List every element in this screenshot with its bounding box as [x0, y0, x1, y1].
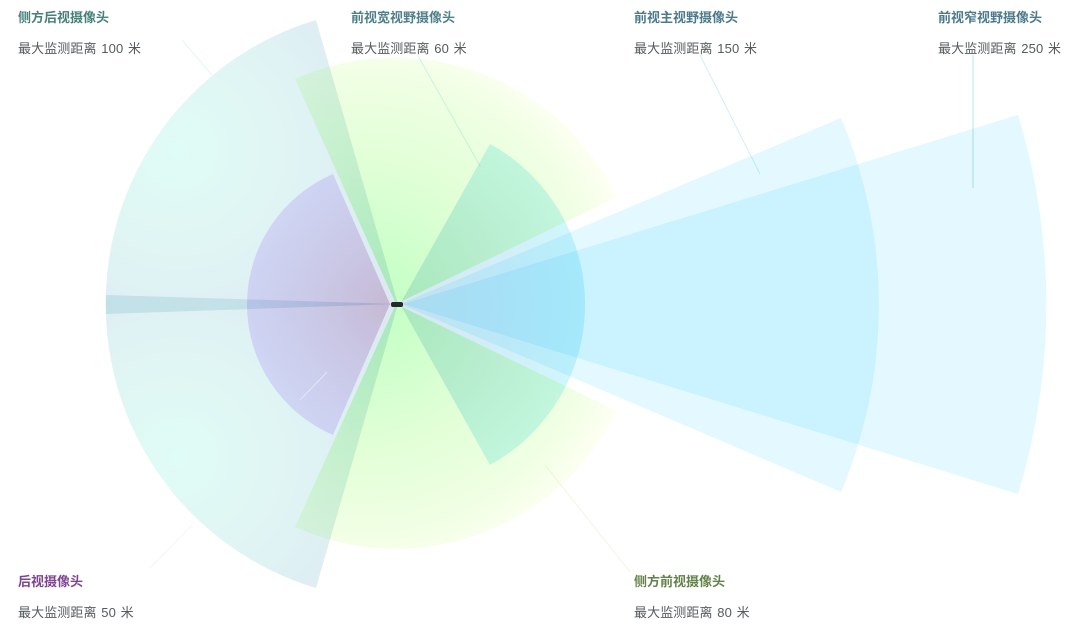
- label: rear camera: 后视摄像头: [18, 574, 83, 589]
- sector: side front camera lower: [295, 304, 617, 549]
- sector: wide front camera: [400, 144, 585, 465]
- rear leader line over sector: [300, 372, 327, 400]
- label: side rear camera: 侧方后视摄像头: [18, 10, 109, 25]
- label: wide front camera: [351, 10, 467, 56]
- label: side front camera: 最大监测距离 80 米: [634, 605, 750, 620]
- label: narrow front camera: [938, 10, 1061, 56]
- label: narrow front camera: 前视窄视野摄像头: [938, 10, 1042, 25]
- label: rear camera: [18, 574, 134, 620]
- sector: rear camera: [247, 174, 390, 435]
- label: side rear camera: [18, 10, 141, 56]
- leader lines: [150, 40, 973, 572]
- sector: side front camera upper: [295, 58, 617, 304]
- label: main front camera: [634, 10, 757, 56]
- label: wide front camera: 最大监测距离 60 米: [351, 41, 467, 56]
- sector: side rear camera lower: [106, 295, 398, 588]
- label: wide front camera: 前视宽视野摄像头: [351, 10, 455, 25]
- sector: side rear camera upper: [106, 20, 398, 314]
- car: [391, 302, 403, 307]
- label: side front camera: 侧方前视摄像头: [634, 574, 725, 589]
- label: rear camera: 最大监测距离 50 米: [18, 605, 134, 620]
- label: side rear camera: 最大监测距离 100 米: [18, 41, 141, 56]
- sector: main front camera: [400, 118, 879, 492]
- label: main front camera: 前视主视野摄像头: [634, 10, 738, 25]
- sector: narrow front camera: [403, 115, 1046, 494]
- label: main front camera: 最大监测距离 150 米: [634, 41, 757, 56]
- label: side front camera: [634, 574, 750, 620]
- label: narrow front camera: 最大监测距离 250 米: [938, 41, 1061, 56]
